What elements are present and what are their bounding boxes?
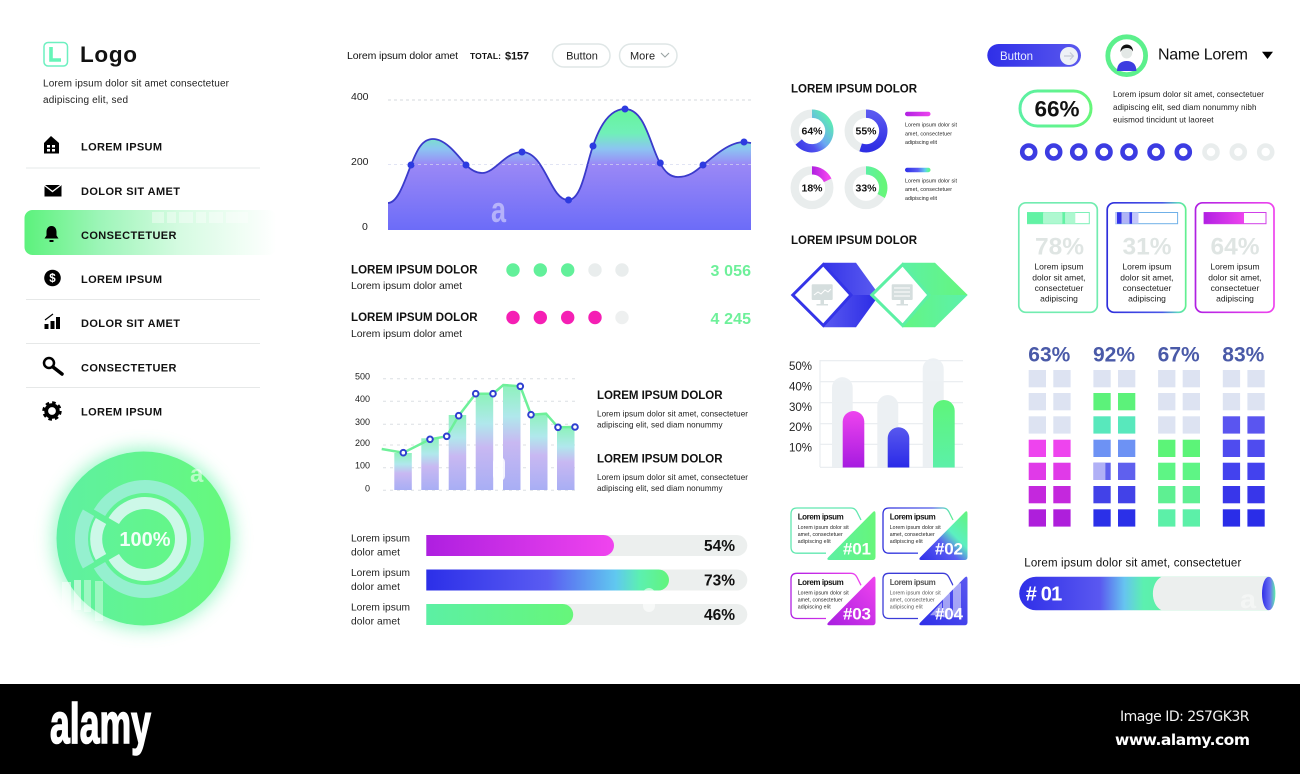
pictorial grid: 67% (1158, 344, 1200, 527)
heading: donuts: LOREM IPSUM DOLOR (791, 84, 918, 96)
progress 54%: dolor amet (351, 548, 400, 558)
pictorial grid: 83%: 83% (1222, 344, 1265, 367)
menu labels: LOREM IPSUM (81, 142, 162, 154)
stat card 64%: Lorem ipsum (1210, 262, 1260, 272)
rating row two (351, 311, 751, 340)
stat card 31%: Lorem ipsum (1122, 262, 1172, 272)
stat card 31%: 31% (1122, 233, 1172, 260)
callout #03: adipiscing elit (798, 604, 831, 610)
stat card 78%: 78% (1035, 233, 1084, 260)
menu labels: DOLOR SIT AMET (81, 186, 180, 198)
heading: hexagons: LOREM IPSUM DOLOR (791, 235, 918, 247)
donut legend (905, 112, 958, 202)
callout #01: #01 (843, 539, 871, 558)
top bar: total and buttons: Lorem ipsum dolor amet (347, 50, 458, 62)
pictorial grid: 67%: 67% (1158, 344, 1200, 367)
pictorial grid: 92% (1093, 344, 1135, 527)
combo chart: bars and line (355, 372, 578, 494)
icon: logo mark (44, 42, 68, 66)
donut charts: 33% (855, 182, 877, 194)
donut charts: 64% (801, 126, 823, 138)
rating row two: 4 245 (710, 311, 751, 328)
button: Button (566, 50, 598, 62)
callout #03: #03 (843, 605, 871, 624)
stat card 78%: Lorem ipsum (1034, 262, 1084, 272)
sidebar description: Lorem ipsum dolor sit amet consectetuer (43, 78, 230, 90)
callout #01 (791, 508, 876, 560)
callout #03: Lorem ipsum dolor sit (798, 590, 849, 596)
stat card 64%: adipiscing (1216, 294, 1254, 304)
watermark on gauge (62, 461, 204, 621)
stat card 78% (1019, 203, 1097, 312)
callout #02: adipiscing elit (890, 539, 923, 545)
double bar chart: 20% (789, 422, 812, 434)
pictorial grid: 63% (1028, 344, 1071, 527)
icon: avatar (1108, 37, 1146, 75)
callout #04: adipiscing elit (890, 604, 923, 610)
button (552, 44, 610, 67)
icon: search (44, 358, 62, 374)
stat card 78%: adipiscing (1040, 294, 1078, 304)
progress 46% (351, 602, 747, 628)
text block: combo chart notes: LOREM IPSUM DOLOR (597, 390, 723, 402)
combo chart: bars and line: 100 (355, 460, 370, 470)
66% badge: 66% (1034, 97, 1080, 122)
callout #04: Lorem ipsum dolor sit (890, 590, 941, 596)
stat card 64%: 64% (1210, 233, 1260, 260)
user profile: Name Lorem (1158, 46, 1248, 64)
progress 46%: dolor amet (351, 616, 400, 628)
progress 54%: Lorem ipsum (351, 534, 410, 545)
panel: sidebar navigation (24, 42, 276, 419)
stat card 31%: dolor sit amet, (1120, 272, 1174, 282)
top bar: total and buttons: $157 (505, 50, 529, 62)
double bar chart: 50% (789, 361, 812, 373)
text block: combo chart notes: Lorem ipsum dolor sit amet, consectetuer (597, 473, 748, 482)
rating row one (351, 263, 751, 292)
icon: chart (44, 314, 60, 329)
callout #03: Lorem ipsum (798, 578, 844, 587)
donut charts: 18% (801, 182, 823, 194)
callout #04: amet, consectetuer (890, 597, 935, 603)
callout #02: Lorem ipsum dolor sit (890, 525, 941, 531)
sidebar description: adipiscing elit, sed (43, 95, 128, 106)
user profile (1108, 37, 1273, 75)
hexagon pair (793, 263, 968, 327)
top bar: total and buttons: TOTAL: (470, 51, 501, 61)
rating row one: LOREM IPSUM DOLOR (351, 264, 478, 276)
text block: combo chart notes (597, 390, 748, 493)
progress 73% (351, 568, 747, 593)
combo chart: bars and line: 300 (355, 417, 370, 427)
donut legend: amet, consectetuer (905, 132, 952, 138)
stat card 78%: consectetuer (1035, 283, 1084, 293)
icon: dropdown triangle (1262, 52, 1273, 59)
menu labels: DOLOR SIT AMET (81, 318, 180, 330)
area chart: 0 (362, 221, 368, 233)
area chart: 400 (351, 91, 369, 103)
cylinder progress: # 01 (1026, 584, 1062, 606)
stat card 31%: adipiscing (1128, 294, 1166, 304)
donut legend: adipiscing elit (905, 196, 938, 202)
panel: radial 100% gauge (54, 448, 234, 628)
combo chart: bars and line: 400 (355, 394, 370, 404)
callout #01: amet, consectetuer (798, 532, 843, 538)
stat card 64% (1196, 203, 1274, 312)
callout #03 (791, 573, 876, 625)
rating row one: Lorem ipsum dolor amet (351, 280, 462, 292)
donut legend: Lorem ipsum dolor sit (905, 123, 958, 129)
rating row one: 3 056 (710, 263, 751, 280)
text block: combo chart notes: adipiscing elit, sed diam nonummy (597, 484, 723, 493)
text block: badge description: adipiscing elit, sed diam nonummy nibh (1113, 103, 1256, 112)
icon: dollar (44, 270, 61, 286)
menu labels: LOREM IPSUM (81, 406, 162, 418)
more dropdown: More (630, 50, 655, 62)
progress 73%: 73% (704, 572, 735, 590)
combo chart: bars and line: 500 (355, 372, 370, 382)
cylinder progress: a (1240, 584, 1257, 614)
footer url: www.alamy.com (1115, 731, 1250, 749)
callout #01: Lorem ipsum (798, 512, 844, 522)
menu labels (81, 142, 180, 418)
double bar chart: 30% (789, 402, 812, 414)
text block: combo chart notes: Lorem ipsum dolor sit amet, consectetuer (597, 410, 748, 418)
menu labels: CONSECTETUER (81, 362, 177, 374)
callout #01: Lorem ipsum dolor sit (798, 525, 849, 531)
combo chart: bars and line: 200 (355, 438, 370, 448)
area chart: 200 (351, 156, 369, 168)
toggle button (987, 44, 1081, 67)
text block: badge description: euismod tincidunt ut laoreet (1113, 116, 1214, 124)
progress bars (351, 534, 747, 628)
text block: combo chart notes: LOREM IPSUM DOLOR (597, 454, 723, 466)
donut charts (795, 114, 883, 205)
callout #04: Lorem ipsum (890, 578, 936, 587)
icon: home (44, 136, 59, 154)
callout #04 (883, 573, 968, 625)
icon: gear (44, 403, 60, 419)
stat card 31%: consectetuer (1123, 283, 1172, 293)
progress 54% (351, 534, 747, 558)
text block: combo chart notes: adipiscing elit, sed diam nonummy (597, 420, 723, 430)
menu labels: CONSECTETUER (81, 230, 177, 242)
donut charts: 55% (855, 126, 877, 138)
pictorial grid: 83% (1222, 344, 1265, 527)
watermark on highlight (152, 212, 248, 223)
icon: mail (44, 185, 62, 196)
rating row two: Lorem ipsum dolor amet (351, 328, 462, 340)
pictorial grid: 92%: 92% (1093, 344, 1135, 367)
progress 46%: Lorem ipsum (351, 602, 410, 614)
text block: badge description (1113, 90, 1264, 124)
callout #03: amet, consectetuer (798, 597, 843, 603)
progress 46%: 46% (704, 607, 735, 624)
66% badge (1020, 91, 1091, 126)
toggle button: Button (1000, 51, 1033, 63)
double bar chart: 10% (789, 443, 812, 455)
area chart: a (491, 189, 507, 230)
double bar chart (789, 358, 963, 468)
hexagon: green (872, 263, 968, 327)
cylinder progress (1019, 558, 1275, 614)
combo chart: bars and line: 0 (365, 484, 370, 494)
gauge value: 100% (119, 529, 171, 551)
logo wordmark: Logo (80, 42, 137, 67)
more dropdown (620, 44, 677, 67)
stat card 64%: dolor sit amet, (1208, 272, 1262, 282)
stat card 78%: dolor sit amet, (1032, 272, 1086, 282)
cylinder progress: Lorem ipsum dolor sit amet, consectetuer (1024, 558, 1241, 570)
footer image id: Image ID: 2S7GK3R (1120, 709, 1250, 725)
hexagon: blue (793, 263, 879, 327)
icon: dollar: $ (49, 273, 56, 285)
progress 73%: Lorem ipsum (351, 568, 410, 579)
area chart (351, 91, 752, 233)
progress 54%: 54% (704, 538, 735, 555)
ring rating (1022, 146, 1272, 158)
callout #02: #02 (935, 539, 963, 558)
stat card 64%: consectetuer (1211, 283, 1260, 293)
rating row two: LOREM IPSUM DOLOR (351, 312, 478, 324)
callout #04: #04 (935, 605, 964, 624)
menu labels: LOREM IPSUM (81, 274, 162, 286)
footer bar (0, 684, 1300, 774)
text block: badge description: Lorem ipsum dolor sit amet, consectetuer (1113, 90, 1264, 99)
callout #02 (883, 508, 968, 560)
donut legend: amet, consectetuer (905, 187, 952, 193)
donut legend: adipiscing elit (905, 140, 938, 146)
pictorial grid: 63%: 63% (1028, 344, 1071, 367)
active menu highlight (24, 210, 276, 255)
sidebar description (43, 78, 230, 106)
callout #01: adipiscing elit (798, 539, 831, 545)
icon: bell (44, 226, 58, 242)
donut legend: Lorem ipsum dolor sit (905, 178, 958, 184)
callout #02: Lorem ipsum (890, 512, 936, 522)
stat card 31% (1107, 203, 1186, 312)
callout #02: amet, consectetuer (890, 532, 935, 538)
top bar: total and buttons (347, 44, 677, 67)
watermark on gauge: a (190, 461, 204, 488)
double bar chart: 40% (789, 382, 812, 394)
footer logo: alamy (50, 692, 151, 756)
progress 73%: dolor amet (351, 582, 400, 593)
